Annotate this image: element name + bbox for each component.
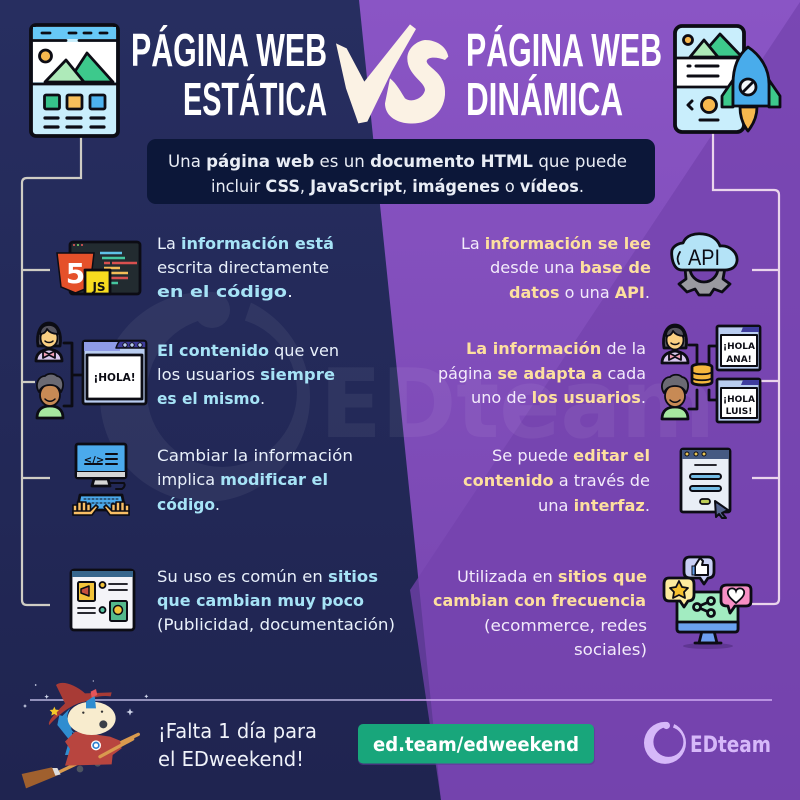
- button: ed.team/edweekend: ed.team/edweekend: [373, 733, 579, 756]
- text: informacion escrita en el codigo: [157, 234, 334, 301]
- text: sitios que cambian con frecuencia: (ecommerce, redes: [484, 616, 647, 635]
- intro callout: Una página web es un documento HTML que puede: [168, 152, 627, 171]
- text: informacion desde base de datos: datos o una API.: [509, 283, 650, 302]
- icon: computer with code and hands: </>: [84, 455, 104, 466]
- icon: static web page: [31, 25, 118, 136]
- connector: right tree: [713, 133, 779, 604]
- text: informacion desde base de datos: [461, 234, 651, 302]
- text: editar contenido con interfaz: [463, 446, 650, 515]
- text: sitios que cambian con frecuencia: sociales): [574, 640, 647, 659]
- text: sitios que cambian muy poco: (Publicidad, documentación): [157, 615, 395, 634]
- text: sitios que cambian con frecuencia: [433, 567, 647, 659]
- icon: users see same page: [36, 323, 146, 418]
- icon: API cloud and gear: API: [688, 245, 720, 270]
- text: informacion escrita en el codigo: La información está: [157, 234, 334, 253]
- icon: advertising page: [71, 570, 134, 630]
- text: editar contenido con interfaz: una interfaz.: [538, 496, 650, 515]
- text: informacion se adapta: página se adapta a cada: [438, 364, 646, 383]
- text: cambiar la informacion: implica modificar el: [157, 470, 328, 489]
- text: editar contenido con interfaz: contenido a través de: [463, 471, 650, 490]
- heading: página web estática: ESTÁTICA: [183, 73, 327, 125]
- text: editar contenido con interfaz: Se puede editar el: [492, 446, 650, 465]
- icon: dynamic page with rocket: [675, 26, 780, 132]
- intro callout: incluir CSS, JavaScript, imágenes o vídeos.: [211, 177, 584, 196]
- logo: EDteam: [644, 722, 771, 764]
- text: falta 1 dia: ¡Falta 1 día para: [158, 719, 317, 743]
- icon: computer with code and hands: [73, 444, 129, 515]
- text: contenido siempre el mismo: los usuarios siempre: [157, 365, 335, 384]
- text: falta 1 dia: el EDweekend!: [158, 747, 304, 771]
- logo: EDteam: EDteam: [690, 733, 771, 758]
- text: sitios que cambian con frecuencia: cambian con frecuencia: [433, 591, 646, 610]
- text: sitios que cambian con frecuencia: Utilizada en sitios que: [457, 567, 647, 586]
- text: informacion desde base de datos: desde una base de: [490, 258, 651, 277]
- heading: página web estática: [131, 24, 327, 125]
- background: purple right side: [359, 0, 800, 800]
- icon: API cloud and gear: [672, 234, 737, 295]
- icon: code files html5 and js: 5: [66, 257, 85, 290]
- intro callout: [147, 139, 655, 204]
- text: informacion se adapta: uno de los usuarios.: [471, 388, 646, 407]
- watermark: EDteam logo: EDteam: [320, 350, 715, 460]
- heading: página web dinámica: [466, 24, 662, 125]
- heading: página web dinámica: PÁGINA WEB: [466, 24, 662, 76]
- text: informacion desde base de datos: La información se lee: [461, 234, 651, 253]
- button: ed.team/edweekend: [358, 724, 595, 765]
- icon: social network monitor: [664, 557, 751, 649]
- watermark: EDteam logo: [100, 292, 715, 502]
- text: informacion escrita en el codigo: escrita directamente: [157, 258, 329, 277]
- text: sitios que cambian muy poco: [157, 567, 395, 634]
- icon: code files html5 and js: JS: [91, 280, 106, 294]
- heading: página web estática: PÁGINA WEB: [131, 24, 327, 76]
- icon: users with personalised pages and database: [662, 325, 760, 422]
- text: informacion se adapta: La información de la: [466, 339, 646, 358]
- icon: users with personalised pages and database: ¡HOLA: [723, 395, 755, 405]
- icon: users with personalised pages and database: ANA!: [726, 355, 752, 365]
- text: sitios que cambian muy poco: Su uso es común en sitios: [157, 567, 378, 586]
- text: falta 1 dia: [158, 719, 317, 771]
- connector: left tree: [22, 137, 81, 605]
- text: contenido siempre el mismo: es el mismo.: [157, 389, 265, 408]
- background: darker purple diagonal: [410, 2, 800, 800]
- icon: users see same page: ¡HOLA!: [93, 372, 136, 384]
- text: informacion se adapta: [438, 339, 646, 407]
- icon: users with personalised pages and database: LUIS!: [726, 407, 752, 417]
- illustration: unicorn wizard on broom: [22, 680, 148, 788]
- brush lettering: VS: [336, 24, 448, 124]
- text: cambiar la informacion: Cambiar la información: [157, 446, 353, 465]
- text: cambiar la informacion: código.: [157, 495, 220, 514]
- text: informacion escrita en el codigo: en el código .: [157, 282, 293, 301]
- icon: code files html5 and js: [57, 242, 140, 294]
- text: contenido siempre el mismo: El contenido que ven: [157, 341, 339, 360]
- text: sitios que cambian muy poco: que cambian muy poco: [157, 591, 364, 610]
- text: contenido siempre el mismo: [157, 341, 339, 408]
- heading: página web dinámica: DINÁMICA: [466, 73, 623, 125]
- text: cambiar la informacion: [157, 446, 353, 514]
- divider: [30, 699, 772, 701]
- icon: users with personalised pages and database: ¡HOLA: [723, 342, 755, 352]
- icon: editor form with cursor: [681, 449, 730, 518]
